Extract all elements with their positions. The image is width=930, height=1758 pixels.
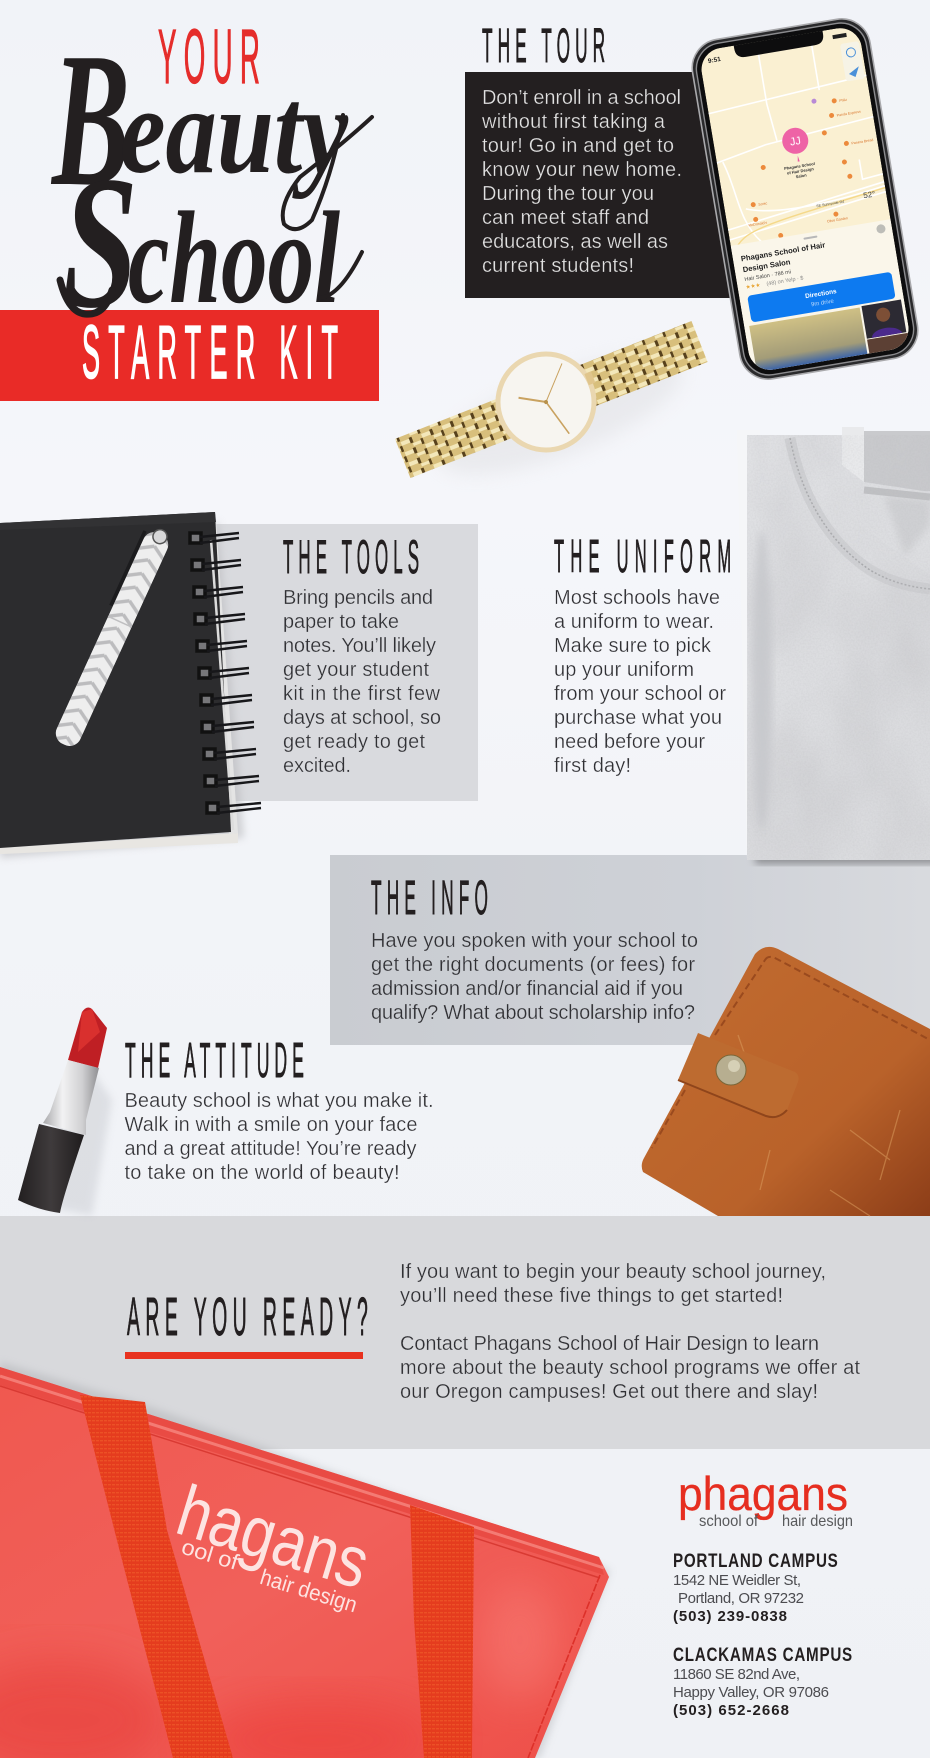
panel: the info background xyxy=(330,855,930,1045)
panel: are you ready band xyxy=(0,1216,930,1449)
text: portland campus: Portland, OR 97232 xyxy=(678,1590,804,1607)
bag logo text: ool of xyxy=(179,1534,242,1575)
text: the tour body: current students! xyxy=(482,255,634,277)
logo: phagans school of hair design: phagans xyxy=(678,1467,848,1520)
panel: the tools background xyxy=(215,524,478,801)
map pin: Phagans School xyxy=(784,161,815,171)
text: the uniform body: need before your xyxy=(554,731,705,753)
text: portland campus xyxy=(673,1549,838,1625)
spiral binding xyxy=(190,533,218,813)
heading: the tour: THE TOUR xyxy=(482,18,605,73)
text: are you ready body: If you want to begin your beauty school journey, xyxy=(400,1261,826,1283)
text: the info body: get the right documents (or fees) for xyxy=(371,954,695,976)
icon: phone with map: Panda Express xyxy=(836,110,861,118)
text: the tools body: days at school, so xyxy=(283,707,441,729)
text: the info body: admission and/or financial aid if you xyxy=(371,978,683,1000)
title: beauty school script: chool xyxy=(128,184,340,331)
text: the uniform body: purchase what you xyxy=(554,707,722,729)
text: portland campus: 1542 NE Weidler St, xyxy=(673,1572,801,1589)
text: the tour body: educators, as well as xyxy=(482,231,668,253)
logo: phagans school of hair design: hair design xyxy=(782,1513,853,1530)
place card: Directions xyxy=(805,288,838,300)
text: the attitude body: to take on the world of beauty! xyxy=(124,1162,400,1184)
place card: ★★★ xyxy=(745,282,761,291)
icon: folded white t-shirt xyxy=(737,427,930,860)
heading: the uniform: THE UNIFORM xyxy=(554,532,731,583)
text: the uniform body: Most schools have xyxy=(554,587,720,609)
text: the tools body: paper to take xyxy=(283,611,399,633)
text: the tools body: get your student xyxy=(283,659,429,681)
icon: chevron pen xyxy=(56,529,168,746)
text: the attitude body: and a great attitude! You’re ready xyxy=(124,1138,416,1160)
map pin: of Hair Design xyxy=(787,166,815,176)
text: clackamas campus xyxy=(673,1643,852,1719)
place card: Design Salon xyxy=(742,257,791,274)
text: clackamas campus: Happy Valley, OR 97086 xyxy=(673,1684,829,1701)
text: the attitude body: Beauty school is what you make it. xyxy=(124,1090,434,1112)
bag logo text: hair design xyxy=(257,1564,360,1617)
text: the tour body: Don’t enroll in a school xyxy=(482,87,681,109)
text: the attitude body xyxy=(124,1090,434,1184)
text: are you ready body: you’ll need these five things to get started! xyxy=(400,1285,783,1307)
text: are you ready body: Contact Phagans School of Hair Design to learn xyxy=(400,1333,819,1355)
icon: gold watch xyxy=(385,297,717,503)
icon: phone with map: Sonic xyxy=(758,201,768,207)
underline: red bar xyxy=(125,1352,363,1359)
text: the tour body: can meet staff and xyxy=(482,207,649,229)
status bar and notch xyxy=(708,31,864,81)
text: the tools body: kit in the first few xyxy=(283,683,441,705)
icon: lipstick xyxy=(18,1008,112,1216)
text: the attitude body: Walk in with a smile on your face xyxy=(124,1114,418,1136)
text: are you ready body: more about the beauty school programs we offer at xyxy=(400,1357,860,1379)
icon: spiral notebook xyxy=(0,512,261,854)
title: your: YOUR xyxy=(158,15,260,100)
text: the info body xyxy=(371,930,698,1024)
heading: the info: THE INFO xyxy=(371,870,488,925)
status bar and notch: 9:51 xyxy=(707,56,722,65)
title: beauty school script xyxy=(51,13,349,348)
place card: Hair Salon · 786 mi xyxy=(744,269,791,283)
text: clackamas campus: 11860 SE 82nd Ave, xyxy=(673,1666,800,1683)
text: the tools body: excited. xyxy=(283,755,351,777)
title: beauty school script: eauty xyxy=(120,62,349,199)
title: starter kit: STARTER KIT xyxy=(82,310,338,394)
text: the tools body: Bring pencils and xyxy=(283,587,433,609)
place card: (48) on Yelp · $ xyxy=(766,275,804,287)
text: the info body: qualify? What about scholarship info? xyxy=(371,1002,695,1024)
text: portland campus: PORTLAND CAMPUS xyxy=(673,1549,838,1571)
text: are you ready body xyxy=(400,1261,860,1403)
text: clackamas campus: CLACKAMAS CAMPUS xyxy=(673,1643,852,1665)
heading: are you ready: ARE YOU READY? xyxy=(127,1286,368,1347)
bag logo text: hagans xyxy=(168,1471,378,1604)
icon: phone with map: Philz xyxy=(839,98,848,103)
notebook shadow xyxy=(0,520,244,858)
title: beauty school script: B xyxy=(51,13,130,226)
text: the uniform body: from your school or xyxy=(554,683,726,705)
text: the tools body xyxy=(283,587,441,777)
place card: 9m drive xyxy=(811,299,835,308)
heading: the attitude: THE ATTITUDE xyxy=(125,1033,304,1088)
map pin xyxy=(782,128,815,178)
text: the tour body: tour! Go in and get to xyxy=(482,135,674,157)
icon: phone with map: McDonald’s xyxy=(748,221,768,228)
text: the uniform body xyxy=(554,587,726,777)
text: the info body: Have you spoken with your school to xyxy=(371,930,698,952)
text: the uniform body: a uniform to wear. xyxy=(554,611,714,633)
text: the tour body xyxy=(481,87,682,277)
heading: the tools: THE TOOLS xyxy=(283,532,419,584)
icon: phone with map: 52° xyxy=(863,189,876,200)
map pin: Salon xyxy=(795,172,807,179)
left strap xyxy=(80,1395,233,1758)
text: the tour body: without first taking a xyxy=(481,111,666,133)
place card xyxy=(731,219,912,375)
text: the tools body: get ready to get xyxy=(283,731,425,753)
text: the uniform body: up your uniform xyxy=(554,659,694,681)
map pin: JJ xyxy=(789,135,802,149)
icon: phone with map xyxy=(688,15,922,383)
text: the tools body: notes. You’ll likely xyxy=(283,635,436,657)
text: the tour body: know your new home. xyxy=(482,159,682,181)
right strap xyxy=(410,1505,474,1758)
icon: phone with map: Panera Bread xyxy=(851,138,874,146)
icon: leather wallet xyxy=(642,947,930,1216)
place card: Phagans School of Hair xyxy=(740,240,826,263)
text: the tour body: During the tour you xyxy=(482,183,654,205)
t-shirt shadow xyxy=(755,852,930,864)
text: portland campus: (503) 239-0838 xyxy=(673,1608,787,1625)
title flourishes xyxy=(60,115,372,314)
icon: red tote bag xyxy=(0,1360,620,1758)
title: beauty school script: S xyxy=(62,138,138,348)
panel: the tour dark box xyxy=(465,72,755,298)
text: the uniform body: Make sure to pick xyxy=(554,635,712,657)
text: clackamas campus: (503) 652-2668 xyxy=(673,1702,789,1719)
text: the uniform body: first day! xyxy=(554,755,631,777)
title banner: red band xyxy=(0,310,379,401)
text: are you ready body: our Oregon campuses! Get out there and slay! xyxy=(400,1381,818,1403)
icon: phone with map: SE Sunnyside Rd xyxy=(816,200,844,208)
logo: phagans school of hair design: school of xyxy=(699,1513,759,1530)
icon: phone with map: Olive Garden xyxy=(827,216,848,224)
watch shadow xyxy=(424,331,696,499)
map markers xyxy=(750,98,852,238)
